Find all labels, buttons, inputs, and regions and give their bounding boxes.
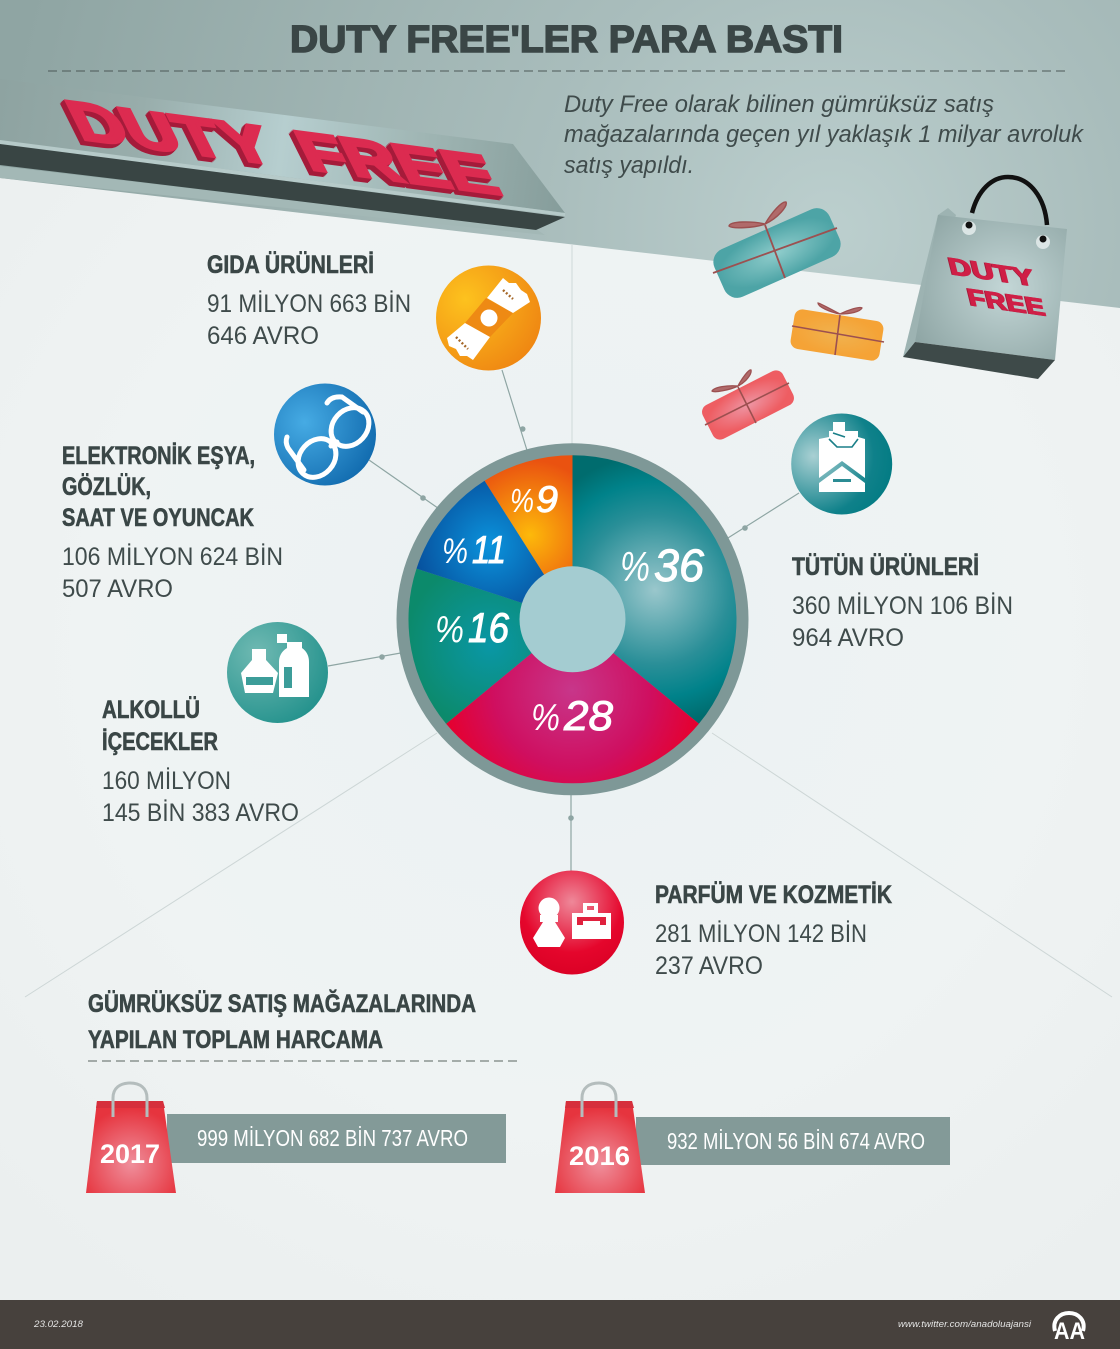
- icon: bottles: [227, 622, 328, 723]
- panel: 2017 total: [86, 1083, 506, 1193]
- label: gida: 91 MİLYON 663 BİN: [207, 289, 411, 318]
- icon: 2016 bag: 2016: [569, 1141, 630, 1171]
- slice 36: [572, 455, 737, 724]
- banner: duty free: [0, 79, 565, 235]
- center hole: [520, 566, 626, 672]
- label: gida: [207, 250, 411, 350]
- heading: total spending: YAPILAN TOPLAM HARCAMA: [88, 1026, 383, 1054]
- panel: 2016 total: [555, 1083, 950, 1193]
- slice 11: [416, 481, 572, 619]
- icon: red gift: [699, 368, 797, 442]
- label: elektronik: GÖZLÜK,: [62, 472, 151, 501]
- top header background: [0, 0, 1120, 308]
- icon: 2016 bag: [555, 1083, 645, 1193]
- label 16: 16: [468, 604, 510, 651]
- label: parfum: PARFÜM VE KOZMETİK: [655, 880, 892, 909]
- label: alkollu: 160 MİLYON: [102, 766, 231, 795]
- label: gida: 646 AVRO: [207, 322, 319, 350]
- label 16: %: [435, 609, 464, 651]
- slice 16: [408, 569, 572, 724]
- label: tutun: 360 MİLYON 106 BİN: [792, 591, 1013, 620]
- label: parfum: 237 AVRO: [655, 952, 763, 980]
- icon: tobacco pack: [791, 414, 892, 514]
- bag lettering: FREE: [965, 284, 1048, 321]
- label 36: %: [620, 543, 650, 590]
- label: gida: GIDA ÜRÜNLERİ: [207, 250, 374, 279]
- label 36: 36: [654, 540, 705, 591]
- icon: glasses: [274, 384, 377, 486]
- label: alkollu: ALKOLLÜ: [102, 695, 200, 724]
- label: alkollu: 145 BİN 383 AVRO: [102, 798, 299, 827]
- label: tutun: 964 AVRO: [792, 624, 904, 652]
- label: elektronik: [62, 442, 283, 603]
- label: tutun: [792, 552, 1013, 652]
- label: elektronik: SAAT VE OYUNCAK: [62, 504, 254, 532]
- slice 28: [446, 619, 699, 783]
- label 9: 9: [536, 479, 558, 520]
- label 11: %: [442, 532, 468, 571]
- intro text: [564, 91, 1085, 179]
- label: elektronik: 106 MİLYON 624 BİN: [62, 542, 283, 571]
- panel: 2017 total: 999 MİLYON 682 BİN 737 AVRO: [197, 1125, 468, 1151]
- bag lettering: [946, 253, 1048, 321]
- intro text: mağazalarında geçen yıl yaklaşık 1 milyar avroluk: [564, 121, 1085, 148]
- label 9: %: [510, 482, 534, 519]
- label: elektronik: 507 AVRO: [62, 575, 173, 603]
- icon: orange gift: [789, 303, 885, 362]
- label 28: 28: [563, 692, 614, 739]
- label: alkollu: İÇECEKLER: [102, 728, 218, 756]
- slice 9: [485, 455, 572, 619]
- date: 23.02.2018: [33, 1319, 84, 1330]
- icon: shopping bag: [903, 177, 1067, 379]
- intro text: satış yapıldı.: [564, 152, 694, 179]
- label 28: %: [531, 697, 560, 739]
- icon: teal gift: [709, 202, 845, 302]
- intro text: Duty Free olarak bilinen gümrüksüz satış: [564, 91, 994, 118]
- footer: [0, 1300, 1120, 1349]
- heading: total spending: [88, 989, 476, 1054]
- connector lines: [25, 245, 1112, 997]
- label: tutun: TÜTÜN ÜRÜNLERİ: [792, 552, 979, 581]
- label: parfum: [655, 880, 892, 980]
- source url: www.twitter.com/anadoluajansi: [898, 1319, 1032, 1330]
- label: parfum: 281 MİLYON 142 BİN: [655, 919, 867, 948]
- label: alkollu: [102, 695, 299, 827]
- bag lettering: DUTY: [946, 253, 1037, 292]
- banner lettering: DUTY FREE: [56, 89, 510, 207]
- label: elektronik: ELEKTRONİK EŞYA,: [62, 442, 255, 470]
- icon: perfume and cosmetics: [520, 870, 624, 974]
- icon: 2017 bag: 2017: [100, 1139, 160, 1169]
- icon: candy: [436, 266, 541, 370]
- title: DUTY FREE'LER PARA BASTI: [290, 19, 843, 61]
- panel: 2016 total: 932 MİLYON 56 BİN 674 AVRO: [667, 1128, 925, 1154]
- logo: AA: [1054, 1318, 1085, 1345]
- pie chart: [396, 443, 748, 795]
- heading: total spending: GÜMRÜKSÜZ SATIŞ MAĞAZALARINDA: [88, 989, 476, 1018]
- label 11: 11: [472, 529, 506, 572]
- icon: 2017 bag: [86, 1083, 176, 1193]
